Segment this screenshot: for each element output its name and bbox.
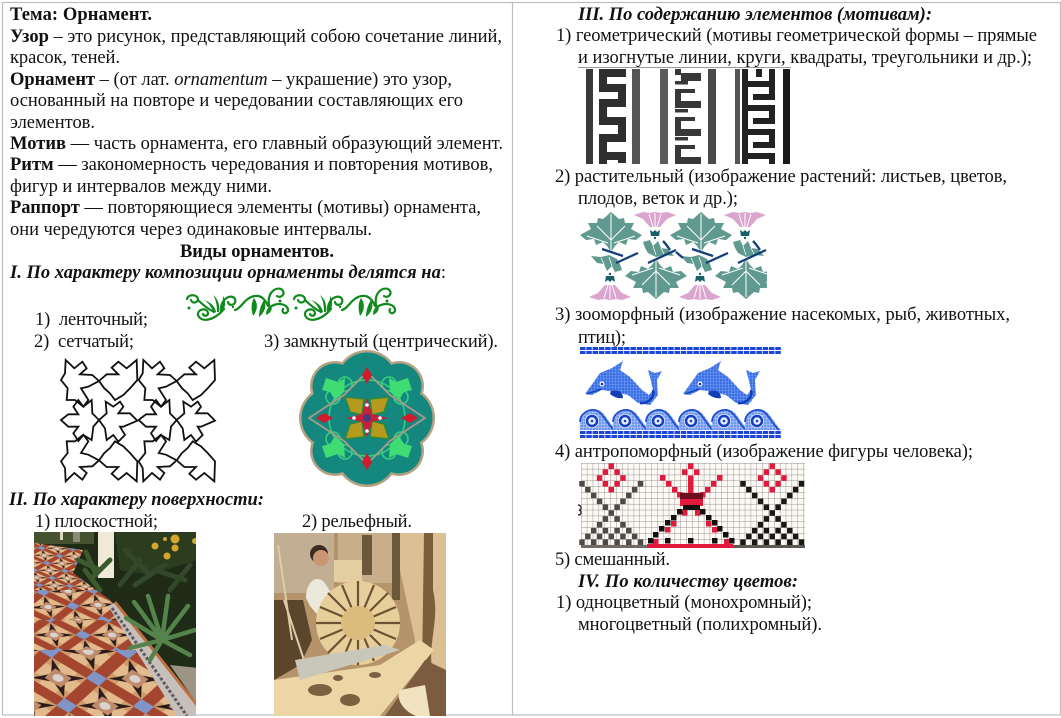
list: composition types <box>34 310 498 352</box>
text block: definitions: Мотив — часть орнамента, его главный образующий элемент. <box>10 134 503 154</box>
panel: left column <box>8 5 503 718</box>
list item: plant: 2) растительный (изображение растений: листьев, цветов, <box>555 167 1007 187</box>
list: surface types: 2) рельефный. <box>302 512 412 532</box>
list item: zoomorphic <box>555 305 1010 348</box>
list item: geometric: и изогнутые линии, круги, квадраты, треугольники и др.); <box>578 48 1032 68</box>
list: surface types: 1) плоскостной; <box>35 512 158 532</box>
list item: anthropomorphic: 4) антропоморфный (изображение фигуры человека); <box>555 442 973 462</box>
icon: mesh ornament <box>61 360 215 481</box>
list item: plant <box>555 167 1007 209</box>
text block: definitions: основанный на повторе и чередовании составляющих его <box>10 91 463 111</box>
text block: definitions: красок, теней. <box>10 48 120 68</box>
heading: topic title: Тема: Орнамент. <box>10 5 152 25</box>
list: composition types: 3) замкнутый (центрический). <box>264 332 498 352</box>
icon: closed centric ornament <box>299 350 435 487</box>
photo: flat tiled path <box>34 532 204 718</box>
list item: geometric: 1) геометрический (мотивы геометрической формы – прямые <box>556 26 1037 46</box>
list item: geometric <box>556 26 1037 68</box>
list item: mixed: 5) смешанный. <box>555 550 670 570</box>
list: surface types <box>35 512 412 532</box>
text block: definitions: Орнамент – (от лат. ornamentum – украшение) это узор, <box>10 70 452 90</box>
image: anthropomorphic embroidery pattern <box>578 463 805 548</box>
list: composition types: 2) сетчатый; <box>34 332 134 352</box>
list: colour count: 1) одноцветный (монохромный); <box>556 593 812 613</box>
image: geometric meander ornament <box>578 68 791 164</box>
list item: plant: плодов, веток и др.); <box>578 189 738 209</box>
heading: section IV: IV. По количеству цветов: <box>577 572 798 592</box>
heading: section III: III. По содержанию элементов (мотивам): <box>577 5 932 25</box>
list: colour count <box>556 593 822 635</box>
heading: section II: II. По характеру поверхности: <box>8 490 264 510</box>
list item: zoomorphic: птиц); <box>578 328 626 348</box>
text block: definitions: Ритм — закономерность чередования и повторения мотивов, <box>10 155 493 175</box>
heading: kinds of ornaments: Виды орнаментов. <box>180 242 334 262</box>
text block: definitions: Раппорт — повторяющиеся элементы (мотивы) орнамента, <box>10 198 481 218</box>
list: colour count: многоцветный (полихромный). <box>578 615 822 635</box>
icon: green ribbon ornament <box>187 289 395 320</box>
text block: definitions: фигур и интервалов между ними. <box>10 177 272 197</box>
text block: definitions: Узор – это рисунок, представляющий собою сочетание линий, <box>10 27 502 47</box>
text block: definitions: элементов. <box>10 113 95 133</box>
text block: definitions <box>10 27 503 240</box>
image: dolphin ornament <box>580 348 781 436</box>
photo: relief wood carving <box>274 533 446 716</box>
panel: right column <box>555 5 1037 635</box>
heading: section I: I. По характеру композиции орнаменты делятся на: <box>9 263 446 283</box>
list item: zoomorphic: 3) зооморфный (изображение насекомых, рыб, животных, <box>555 305 1010 325</box>
text block: definitions: они чередуются через одинаковые интервалы. <box>10 220 372 240</box>
list: composition types: 1) ленточный; <box>35 310 148 330</box>
image: plant ornament <box>580 212 777 300</box>
